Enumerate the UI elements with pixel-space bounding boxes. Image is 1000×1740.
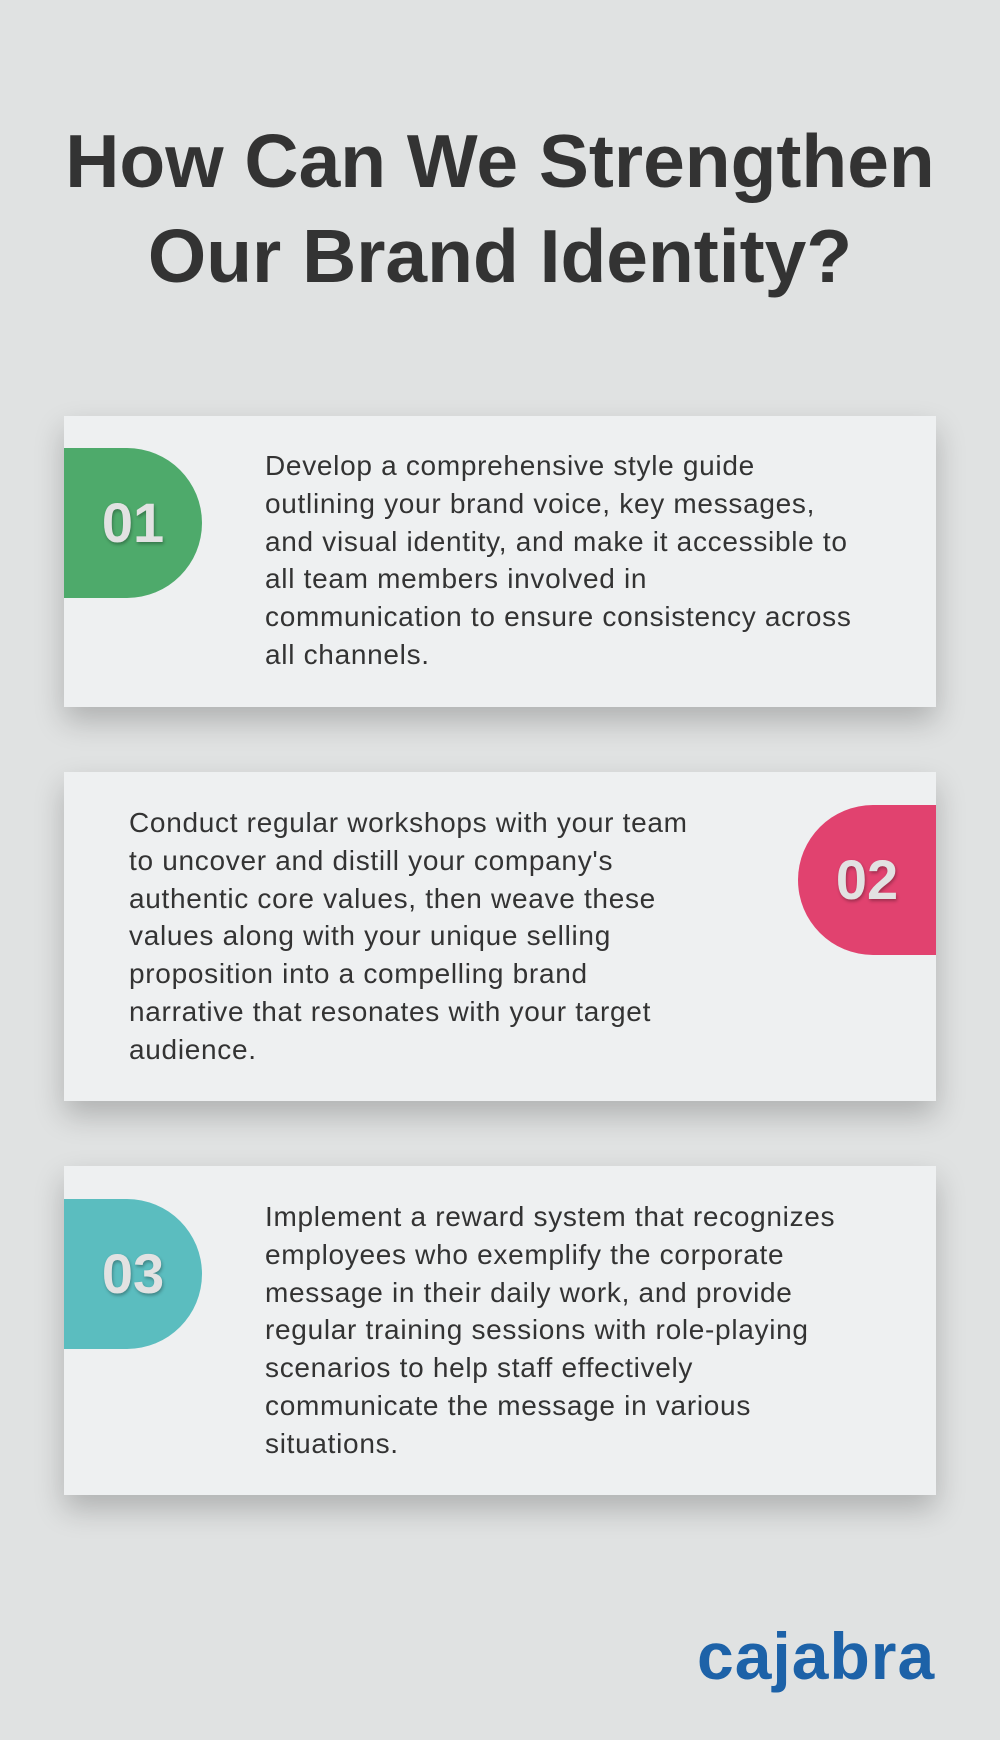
text 01: all team members involved in <box>265 563 647 594</box>
text 03: Implement a reward system that recognizes <box>265 1201 835 1232</box>
text 01: Develop a comprehensive style guide <box>265 450 755 481</box>
text 03: scenarios to help staff effectively <box>265 1352 693 1383</box>
text 02: authentic core values, then weave these <box>129 883 656 914</box>
text 02: values along with your unique selling <box>129 920 611 951</box>
text 03: employees who exemplify the corporate <box>265 1239 784 1270</box>
text 02: narrative that resonates with your target <box>129 996 651 1027</box>
text 03: regular training sessions with role-playing <box>265 1314 809 1345</box>
text 02: audience. <box>129 1034 257 1065</box>
text 01: all channels. <box>265 639 430 670</box>
badge 01 <box>64 448 202 598</box>
panel: step 02 <box>64 772 936 1101</box>
text 03: situations. <box>265 1428 399 1459</box>
title: Our Brand Identity? <box>148 214 852 298</box>
text 02: proposition into a compelling brand <box>129 958 588 989</box>
text 02 <box>129 807 688 1065</box>
panel: step 01 <box>64 416 936 707</box>
badge 01: 01 <box>102 491 164 554</box>
panel: step 03 <box>64 1166 936 1495</box>
text 01: communication to ensure consistency across <box>265 601 852 632</box>
text 02: to uncover and distill your company's <box>129 845 613 876</box>
badge 03: 03 <box>102 1242 164 1305</box>
title: How Can We Strengthen <box>65 119 935 203</box>
text 03 <box>265 1201 835 1459</box>
badge 02 <box>798 805 936 955</box>
text 03: communicate the message in various <box>265 1390 751 1421</box>
text 03: message in their daily work, and provide <box>265 1277 793 1308</box>
title <box>65 119 935 298</box>
text 01: and visual identity, and make it accessible to <box>265 526 848 557</box>
logo: cajabra <box>697 1619 935 1693</box>
badge 02: 02 <box>836 848 898 911</box>
badge 03 <box>64 1199 202 1349</box>
text 01: outlining your brand voice, key messages, <box>265 488 815 519</box>
text 01 <box>265 450 852 670</box>
text 02: Conduct regular workshops with your team <box>129 807 688 838</box>
